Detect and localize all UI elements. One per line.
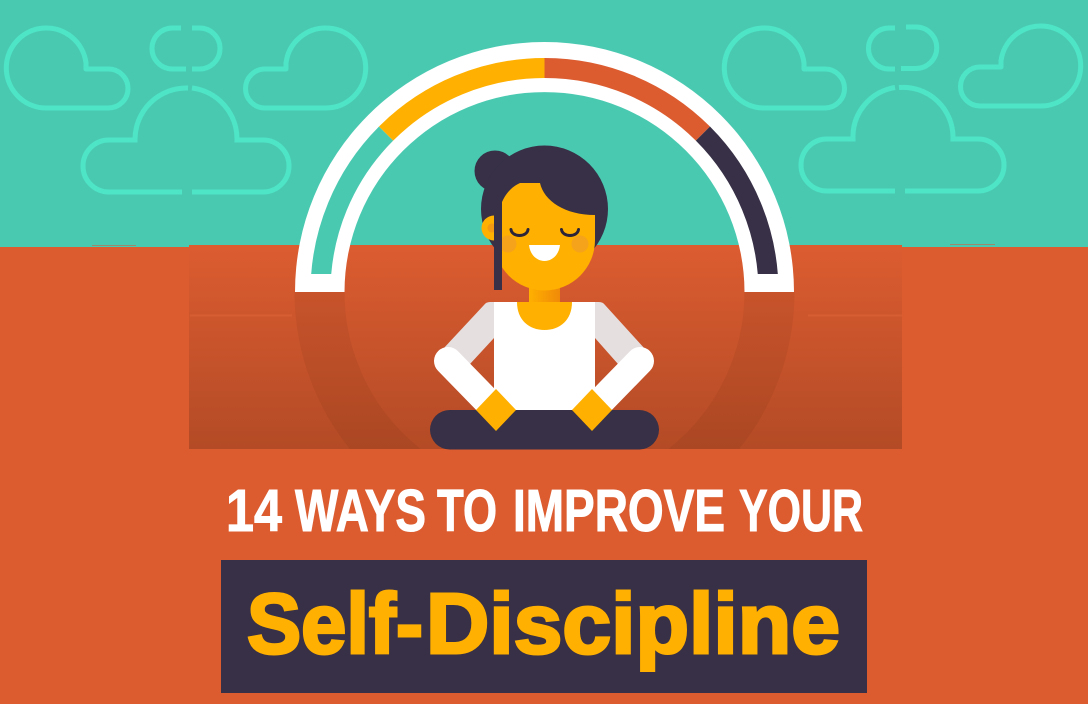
heading: 14 ways: YOUR (739, 478, 863, 544)
right hand (572, 389, 612, 431)
cloud: left big split (83, 88, 289, 192)
cloud: left right-facing (246, 28, 366, 108)
heading: 14 ways: IMPROVE (513, 478, 725, 544)
heading: 14 ways: 14 (226, 478, 282, 544)
torso (494, 302, 595, 410)
neckline (517, 302, 572, 330)
clouds: right group (724, 26, 1081, 191)
cloud: left large (6, 28, 128, 108)
cloud: right big split (801, 87, 1004, 191)
shadow panel (189, 245, 902, 449)
gauge segments (320, 68, 768, 292)
neck (529, 285, 560, 303)
heading: 14 ways (226, 478, 863, 544)
hair bun (474, 150, 516, 192)
right cheek (572, 236, 588, 252)
sleeves (443, 302, 645, 364)
hair (481, 146, 608, 272)
clouds: left group (6, 28, 366, 192)
title banner (221, 560, 867, 693)
arch shadow ring (294, 292, 794, 442)
gauge arch (295, 42, 794, 292)
mouth (529, 245, 560, 261)
cloud: right pill (868, 27, 937, 69)
left cheek (500, 236, 516, 252)
segment: navy (703, 134, 768, 292)
heading: 14 ways: WAYS (295, 478, 426, 544)
segment: orange (544, 68, 703, 134)
forearms (448, 361, 640, 400)
character: meditating person (430, 146, 659, 450)
title: self-discipline: Self- (247, 577, 423, 672)
legs (430, 410, 659, 450)
right eye (562, 230, 578, 236)
ear (482, 216, 506, 240)
cloud: left pill (152, 28, 220, 69)
cloud: right right-facing (961, 26, 1081, 106)
left eye (511, 230, 528, 236)
background: orange ground (0, 247, 1088, 704)
hair strand (494, 193, 502, 290)
heading: 14 ways: TO (437, 478, 497, 544)
segment: teal (320, 134, 386, 292)
arch white band (295, 42, 794, 292)
left hand (476, 389, 516, 431)
face (494, 183, 595, 290)
background: teal sky (0, 0, 1088, 247)
horizon specks (92, 244, 995, 246)
title: self-discipline: Discipline (426, 577, 840, 672)
title: self-discipline (247, 577, 840, 672)
cloud: right large (724, 28, 844, 108)
segment: gold (386, 68, 544, 134)
